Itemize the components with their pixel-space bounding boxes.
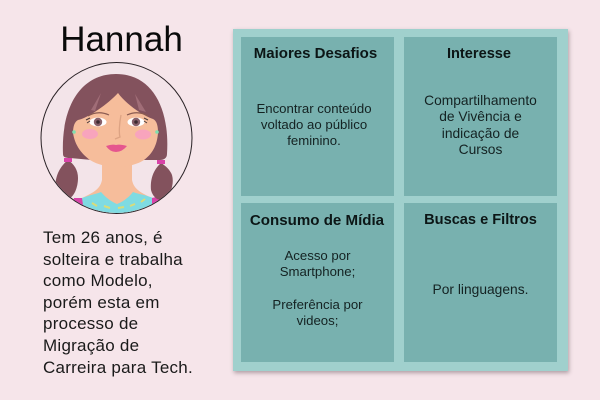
card: Consumo de Mídia: Preferência por bbox=[272, 297, 363, 312]
text block: biography: processo de bbox=[43, 314, 138, 333]
card: Maiores Desafios bbox=[241, 37, 394, 196]
text block: biography: solteira e trabalha bbox=[43, 250, 183, 269]
text block: biography: porém esta em bbox=[43, 293, 160, 312]
card: Consumo de Mídia: Consumo de Mídia bbox=[250, 212, 384, 229]
card: Interesse: Compartilhamento bbox=[424, 93, 537, 108]
card: Maiores Desafios: Maiores Desafios bbox=[254, 44, 377, 62]
card: Consumo de Mídia: Smartphone; bbox=[280, 264, 355, 279]
card: Buscas e Filtros: Por linguagens. bbox=[433, 282, 528, 296]
card: Consumo de Mídia: Acesso por bbox=[284, 248, 350, 263]
card: Interesse: de Vivência e bbox=[439, 109, 522, 124]
card: Consumo de Mídia: videos; bbox=[297, 313, 338, 328]
card: Buscas e Filtros bbox=[404, 203, 557, 362]
card: Interesse bbox=[404, 37, 557, 196]
card: Maiores Desafios: feminino. bbox=[287, 133, 341, 148]
text block: biography: como Modelo, bbox=[43, 271, 153, 290]
card: Interesse: Cursos bbox=[459, 142, 502, 157]
card: Interesse: indicação de bbox=[442, 126, 519, 141]
text block: biography: Tem 26 anos, é bbox=[43, 228, 163, 247]
panel: persona attributes bbox=[233, 29, 568, 371]
card: Maiores Desafios: Encontrar conteúdo bbox=[256, 100, 372, 116]
card: Maiores Desafios: voltado ao público bbox=[261, 117, 367, 132]
text block: biography: Migração de bbox=[43, 336, 139, 355]
text block: biography: Carreira para Tech. bbox=[43, 358, 193, 377]
avatar: portrait illustration bbox=[40, 62, 192, 214]
card: Consumo de Mídia bbox=[241, 203, 394, 362]
card: Buscas e Filtros: Buscas e Filtros bbox=[424, 212, 537, 228]
card: Interesse: Interesse bbox=[447, 46, 511, 62]
title: persona name: Hannah bbox=[60, 20, 183, 59]
text block: biography bbox=[43, 228, 193, 377]
